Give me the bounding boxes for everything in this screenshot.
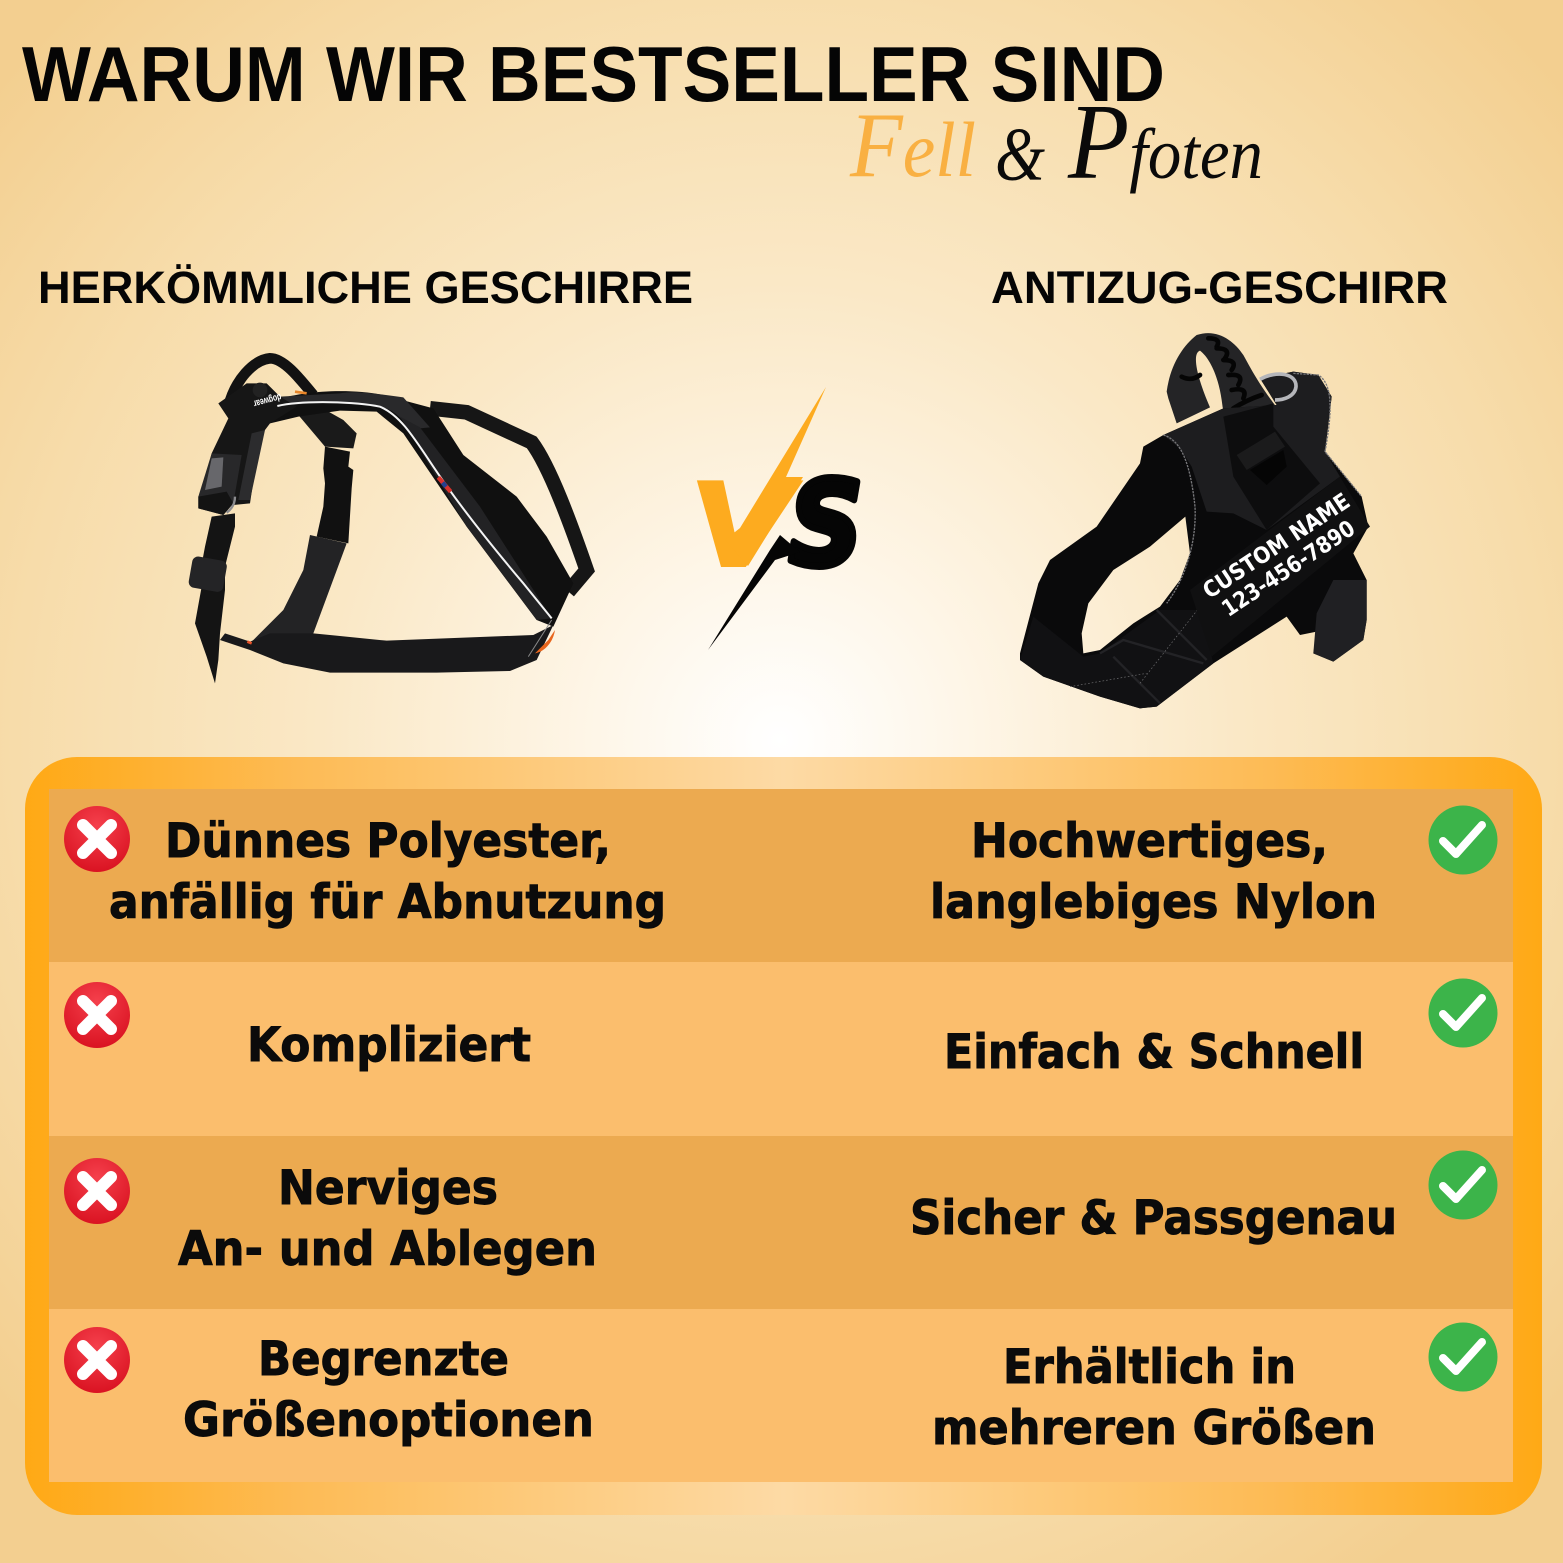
heading: anti-pull harness: ANTIZUG-GESCHIRR (991, 262, 1448, 313)
icon: red cross 1 (64, 806, 130, 872)
text: row 4 left: Größenoptionen (183, 1393, 594, 1448)
text: row 4 right: Erhältlich in (1003, 1340, 1296, 1395)
icon: green check 3 (1428, 1150, 1498, 1220)
letter S: S (789, 455, 863, 593)
text: row 4 left: Begrenzte (258, 1332, 509, 1387)
row 4 (49, 1309, 1513, 1482)
comparison panel (25, 757, 1542, 1515)
text: row 4 right: mehreren Größen (932, 1401, 1376, 1456)
icon: red cross 4 (64, 1327, 130, 1393)
name patch: 123-456-7890 (1217, 516, 1360, 622)
icon: green check 2 (1428, 978, 1498, 1048)
text: row 2 right: Einfach & Schnell (944, 1025, 1364, 1080)
name patch: CUSTOM NAME (1198, 488, 1355, 604)
lightning bolt top (725, 387, 826, 566)
icon: red cross 2 (64, 982, 130, 1048)
panel frame (25, 757, 1542, 1515)
small brand label: dogwear (252, 391, 282, 409)
vs emblem (676, 387, 863, 650)
row 1 (49, 789, 1513, 963)
title: WARUM WIR BESTSELLER SIND (22, 30, 1165, 118)
text: row 1 left: anfällig für Abnutzung (109, 875, 666, 930)
text: row 2 left: Kompliziert (247, 1018, 531, 1073)
brand logo (849, 83, 1263, 202)
text: row 3 left: Nerviges (278, 1161, 498, 1216)
text: row 1 left: Dünnes Polyester, (165, 814, 611, 869)
row 3 (49, 1136, 1513, 1310)
illustration: anti-pull harness (1020, 333, 1370, 708)
brand logo: Pfoten (1067, 83, 1263, 202)
brand logo: Fell (849, 94, 976, 196)
icon: green check 1 (1428, 806, 1498, 874)
brand logo: & (995, 113, 1045, 197)
text: row 1 right: langlebiges Nylon (930, 875, 1377, 930)
lightning bolt bottom (708, 535, 800, 650)
letter V: V (676, 456, 807, 593)
row 2 (49, 962, 1513, 1136)
name patch (1190, 477, 1370, 657)
text: row 3 left: An- und Ablegen (178, 1222, 597, 1277)
icon: green check 4 (1428, 1322, 1498, 1392)
icon: red cross 3 (64, 1158, 130, 1224)
text: row 3 right: Sicher & Passgenau (910, 1191, 1397, 1246)
heading: conventional harnesses: HERKÖMMLICHE GESCHIRRE (38, 262, 693, 313)
illustration: conventional harness (188, 358, 587, 683)
text: row 1 right: Hochwertiges, (971, 814, 1328, 869)
